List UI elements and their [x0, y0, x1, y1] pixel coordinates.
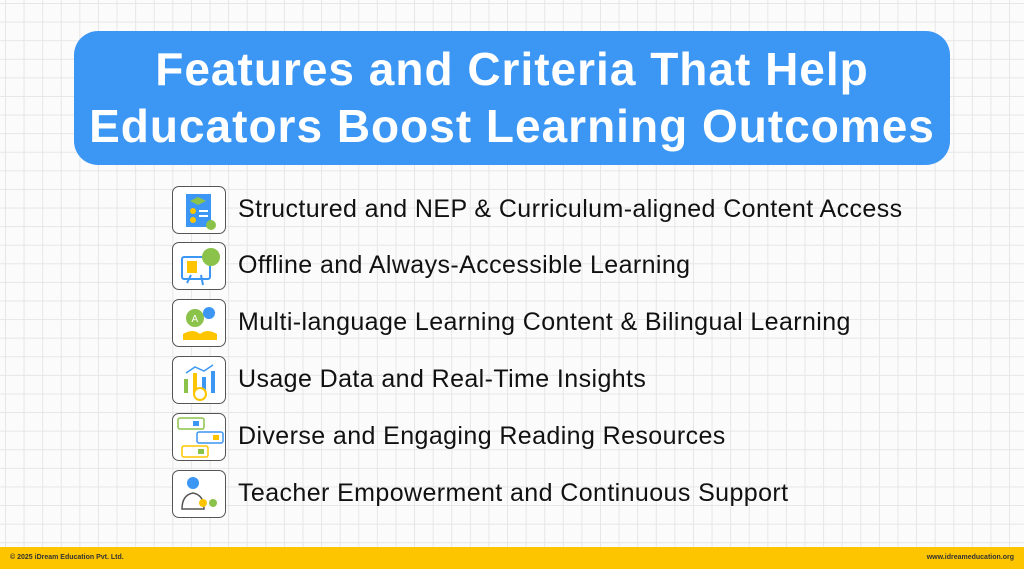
- footer: www.idreameducation.org: [927, 554, 1014, 561]
- icon: languages book: A: [192, 314, 198, 325]
- item 2: [172, 242, 690, 290]
- item 4: [172, 356, 646, 404]
- text: Usage Data and Real-Time Insights: [238, 365, 646, 393]
- icon: languages book: [172, 299, 226, 347]
- text: Structured and NEP & Curriculum-aligned Content Access: [238, 195, 903, 223]
- icon: curriculum document: [172, 186, 226, 234]
- icon: tablet offline: [172, 242, 226, 290]
- item 3: [172, 299, 851, 347]
- text: Offline and Always-Accessible Learning: [238, 251, 690, 279]
- item 1: [172, 186, 903, 234]
- icon: teacher: [172, 470, 226, 518]
- title: [74, 31, 950, 165]
- icon: chart: [172, 356, 226, 404]
- title: Educators Boost Learning Outcomes: [89, 100, 935, 152]
- title: Features and Criteria That Help: [155, 43, 869, 95]
- text: Diverse and Engaging Reading Resources: [238, 422, 726, 450]
- footer: [0, 547, 1024, 569]
- text: Multi-language Learning Content & Bilingual Learning: [238, 308, 851, 336]
- text: Teacher Empowerment and Continuous Support: [238, 479, 788, 507]
- icon: reading cards: [172, 413, 226, 461]
- item 6: [172, 470, 788, 518]
- item 5: [172, 413, 726, 461]
- footer: © 2025 iDream Education Pvt. Ltd.: [10, 554, 124, 561]
